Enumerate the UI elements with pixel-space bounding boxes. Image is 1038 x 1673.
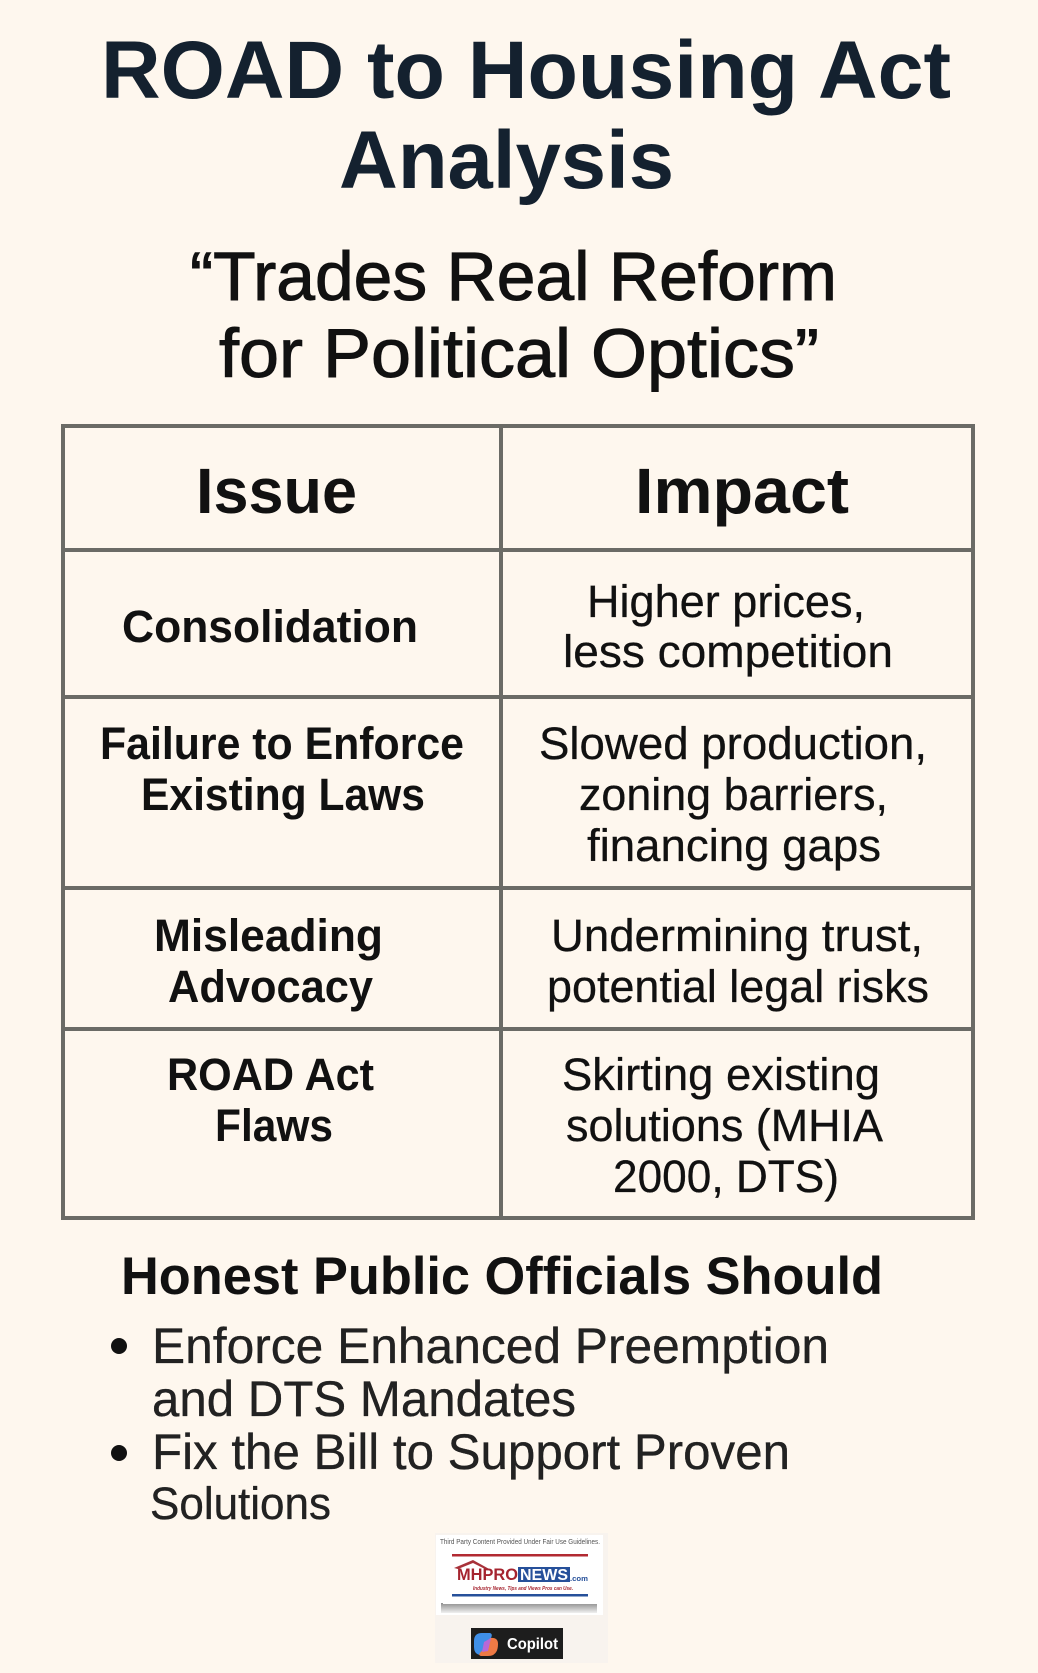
row: failure to enforce impact	[539, 718, 927, 871]
row: road act flaws issue: ROAD Act	[167, 1049, 374, 1100]
row: road act flaws impact: Skirting existing	[562, 1049, 880, 1100]
row: misleading advocacy issue	[154, 910, 383, 1012]
mhpronews logo	[441, 1549, 597, 1613]
subtitle quote: “Trades Real Reform	[190, 238, 837, 315]
copilot badge	[471, 1628, 563, 1659]
row: misleading advocacy impact: potential legal risks	[547, 961, 929, 1012]
row: road act flaws issue: Flaws	[215, 1100, 333, 1151]
title: Analysis	[339, 115, 674, 206]
section heading: honest public officials should: Honest Public Officials Should	[121, 1247, 883, 1306]
row: misleading advocacy impact: Undermining trust,	[551, 910, 923, 961]
table: issue and impact	[63, 426, 973, 1218]
header: issue: Issue	[196, 455, 357, 527]
bullet 2: Fix the Bill to Support Proven	[152, 1424, 790, 1480]
logo block	[435, 1533, 608, 1663]
row: misleading advocacy issue: Misleading	[154, 910, 383, 961]
row: consolidation issue: Consolidation	[122, 601, 418, 652]
row: road act flaws issue	[167, 1049, 374, 1151]
row: failure to enforce issue: Existing Laws	[141, 769, 425, 820]
bullet 1: and DTS Mandates	[152, 1371, 576, 1427]
copilot badge: Copilot	[507, 1636, 559, 1653]
row: consolidation impact	[563, 576, 893, 677]
header: impact: Impact	[635, 455, 849, 527]
subtitle quote	[190, 238, 837, 392]
title	[101, 25, 951, 206]
icon: copilot	[474, 1633, 498, 1656]
mhpronews logo: NEWS	[520, 1567, 568, 1584]
row: road act flaws impact	[562, 1049, 883, 1202]
bullet 1: Enforce Enhanced Preemption	[152, 1318, 829, 1374]
row: road act flaws impact: 2000, DTS)	[613, 1151, 839, 1202]
subtitle quote: for Political Optics”	[219, 315, 819, 392]
bullet 2: Solutions	[150, 1478, 331, 1529]
mhpronews logo: .com	[570, 1574, 588, 1583]
row: failure to enforce impact: zoning barriers,	[579, 769, 888, 820]
title: ROAD to Housing Act	[101, 25, 951, 116]
bullet list	[111, 1318, 829, 1529]
fair use notice: Third Party Content Provided Under Fair Use Guidelines.	[440, 1539, 600, 1546]
row: consolidation impact: Higher prices,	[587, 576, 865, 627]
mhpronews logo: Industry News, Tips and Views Pros can Use.	[473, 1586, 573, 1592]
mhpronews logo: MHPRO	[457, 1565, 518, 1584]
row: misleading advocacy issue: Advocacy	[168, 961, 373, 1012]
row: failure to enforce impact: Slowed production,	[539, 718, 927, 769]
row: failure to enforce issue: Failure to Enforce	[100, 718, 464, 769]
table grid	[63, 426, 973, 1218]
row: failure to enforce issue	[100, 718, 464, 820]
bullet 2	[111, 1424, 790, 1529]
row: road act flaws impact: solutions (MHIA	[566, 1100, 883, 1151]
row: misleading advocacy impact	[547, 910, 929, 1012]
bullet 1	[111, 1318, 829, 1427]
row: consolidation impact: less competition	[563, 626, 893, 677]
row: failure to enforce impact: financing gaps	[587, 820, 881, 871]
